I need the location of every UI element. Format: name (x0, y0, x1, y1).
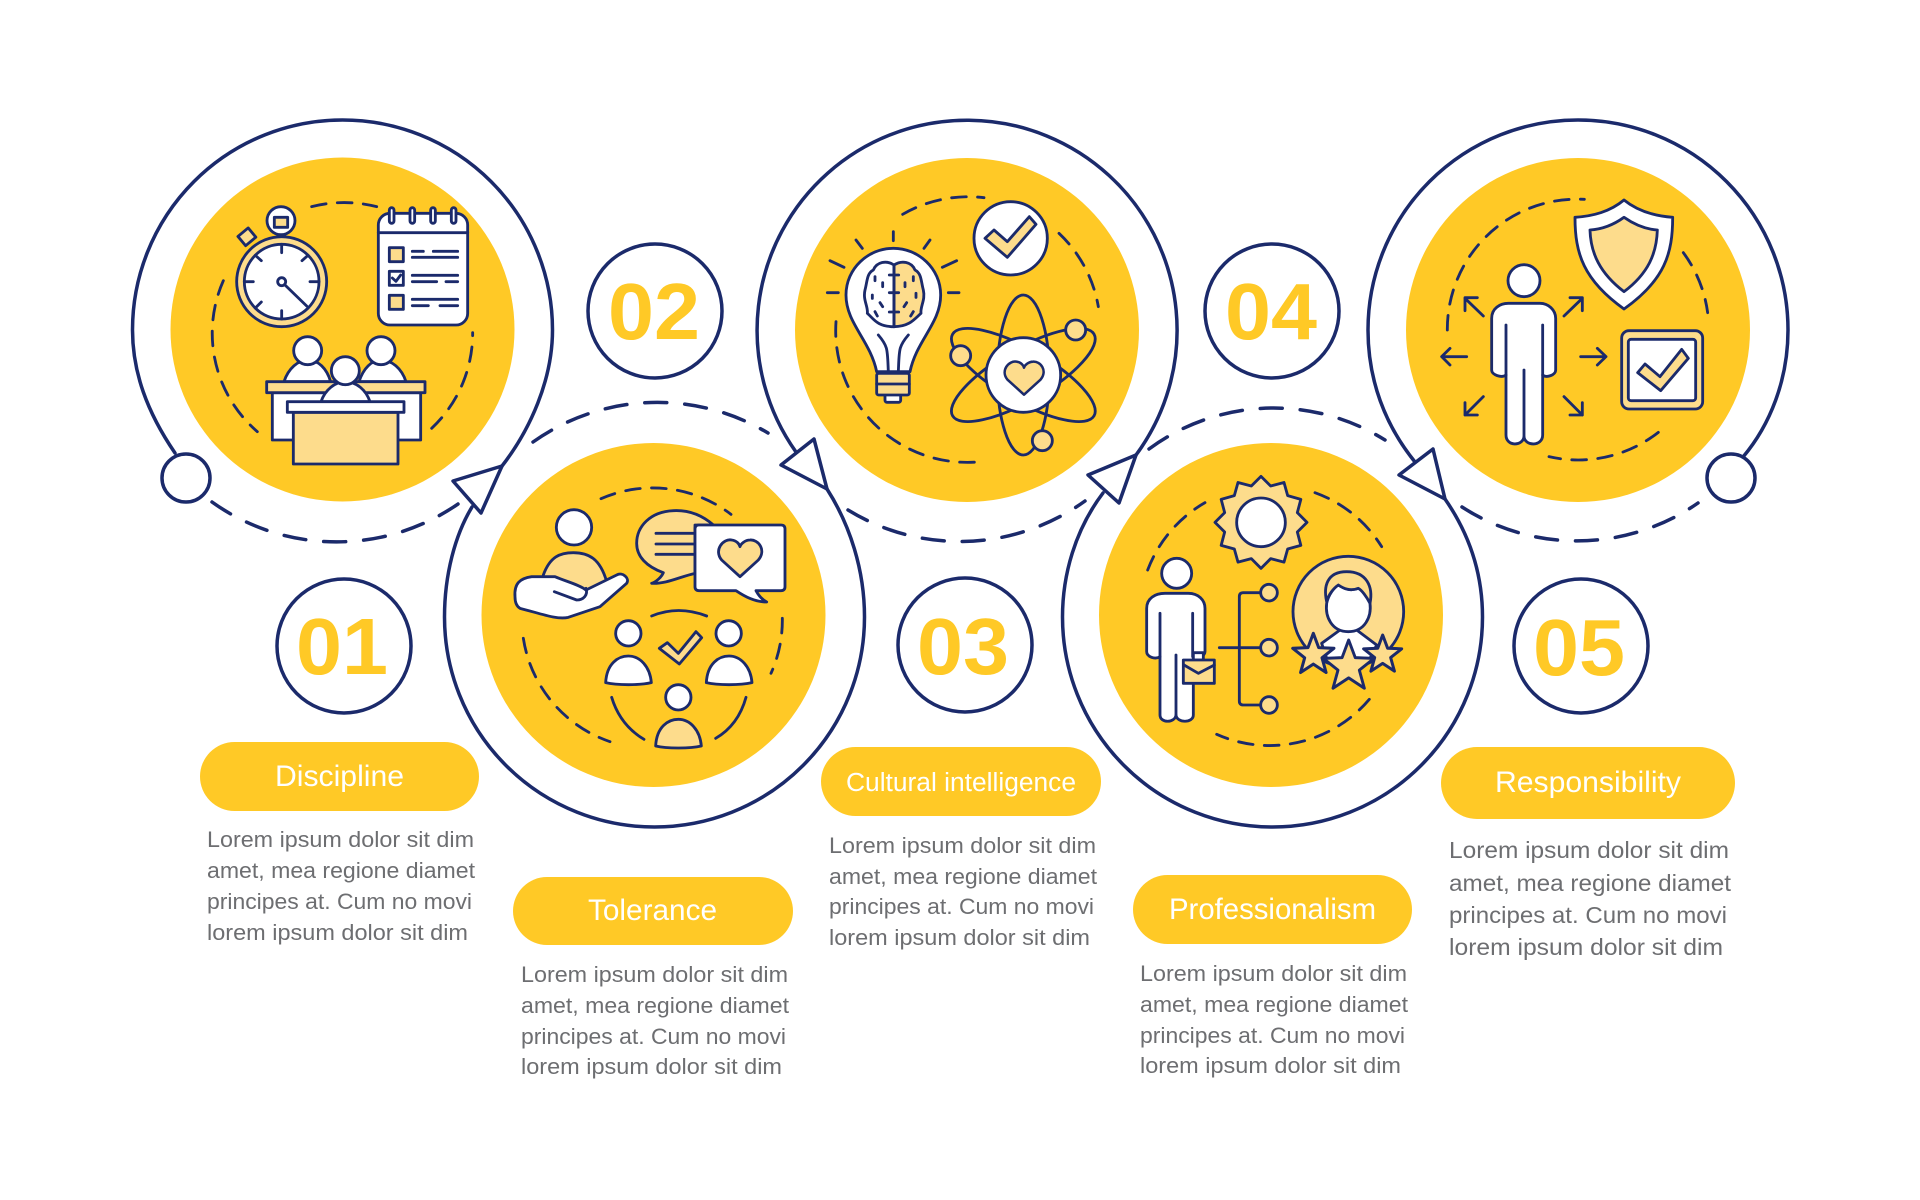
icon: stopwatch, calendar and students at desk (212, 203, 473, 464)
body text 4: Lorem ipsum dolor sit dim (1140, 961, 1407, 986)
number badge 04: 04 (1225, 267, 1318, 356)
yellow disc 3 (795, 158, 1139, 502)
label pill: Tolerance (513, 877, 793, 945)
body text 3: Lorem ipsum dolor sit dim (829, 833, 1096, 858)
body text 2: amet, mea regione diamet (521, 993, 790, 1018)
icon: person, shield and checkbox (1442, 199, 1708, 460)
icon: lightbulb brain, check and atom heart (827, 197, 1107, 462)
body text 4: amet, mea regione diamet (1140, 992, 1409, 1017)
dashed arc 2 (533, 402, 768, 442)
label pill: Cultural intelligence: Cultural intelligence (846, 769, 1076, 797)
body text 2: Lorem ipsum dolor sit dim (521, 962, 788, 987)
body text 4: lorem ipsum dolor sit dim (1140, 1053, 1401, 1078)
number badge 02: 02 (608, 267, 700, 356)
yellow disc 1 (170, 158, 514, 502)
label pill: Discipline (200, 742, 479, 811)
end node right (1707, 454, 1755, 502)
label pill: Responsibility: Responsibility (1495, 766, 1681, 799)
arrow 4 (1399, 449, 1445, 499)
body text 5: Lorem ipsum dolor sit dim (1449, 837, 1729, 863)
panel: 03 cultural intelligence (757, 120, 1177, 950)
number badge 02 (588, 244, 722, 378)
body text 2: principes at. Cum no movi (521, 1024, 786, 1049)
ring outline 4 (1062, 493, 1482, 827)
ring outline 5 (1368, 120, 1788, 462)
panel: 04 professionalism (1062, 244, 1482, 1078)
label pill: Professionalism (1133, 875, 1412, 944)
label pill: Responsibility (1441, 747, 1735, 819)
ring outline 1 (132, 120, 552, 466)
number badge 01: 01 (296, 602, 388, 691)
arrow 2 (781, 439, 827, 489)
body text 4: principes at. Cum no movi (1140, 1023, 1405, 1048)
yellow disc 4 (1099, 443, 1443, 787)
dashed arc 3 (848, 501, 1085, 541)
label pill: Tolerance: Tolerance (588, 894, 717, 927)
body text 5: lorem ipsum dolor sit dim (1449, 934, 1723, 960)
body text 2: lorem ipsum dolor sit dim (521, 1054, 782, 1079)
label pill: Professionalism: Professionalism (1169, 893, 1376, 926)
yellow disc 2 (482, 443, 826, 787)
body text 1: lorem ipsum dolor sit dim (207, 920, 468, 945)
panel: 02 tolerance (444, 244, 864, 1079)
arrow 1 (453, 466, 502, 513)
body text 3: lorem ipsum dolor sit dim (829, 925, 1090, 950)
body text 5: principes at. Cum no movi (1449, 902, 1727, 928)
ring outline 2 (444, 489, 864, 827)
yellow disc 5 (1406, 158, 1750, 502)
panel: 01 discipline (132, 120, 552, 945)
icon: caring hand, speech bubbles and group (515, 488, 785, 748)
number badge 01 (277, 579, 411, 713)
icon: gear, professional and star-rated portrait (1147, 476, 1404, 746)
number badge 05: 05 (1533, 603, 1625, 692)
start node left (162, 454, 210, 502)
dashed arc 5 (1462, 503, 1698, 541)
number badge 05 (1514, 579, 1648, 713)
body text 1: amet, mea regione diamet (207, 858, 476, 883)
body text 5: amet, mea regione diamet (1449, 870, 1731, 896)
panel: 05 responsibility (1368, 120, 1788, 960)
body text 1: principes at. Cum no movi (207, 889, 472, 914)
body text 1: Lorem ipsum dolor sit dim (207, 827, 474, 852)
number badge 03 (898, 578, 1032, 712)
dashed arc 4 (1149, 408, 1385, 449)
label pill: Cultural intelligence (821, 747, 1101, 816)
label pill: Discipline: Discipline (275, 760, 404, 793)
body text 3: amet, mea regione diamet (829, 864, 1098, 889)
dashed arc 1 (212, 502, 458, 542)
arrow 3 (1088, 455, 1136, 503)
body text 3: principes at. Cum no movi (829, 894, 1094, 919)
number badge 04 (1205, 244, 1339, 378)
ring outline 3 (757, 120, 1177, 455)
number badge 03: 03 (917, 602, 1009, 691)
